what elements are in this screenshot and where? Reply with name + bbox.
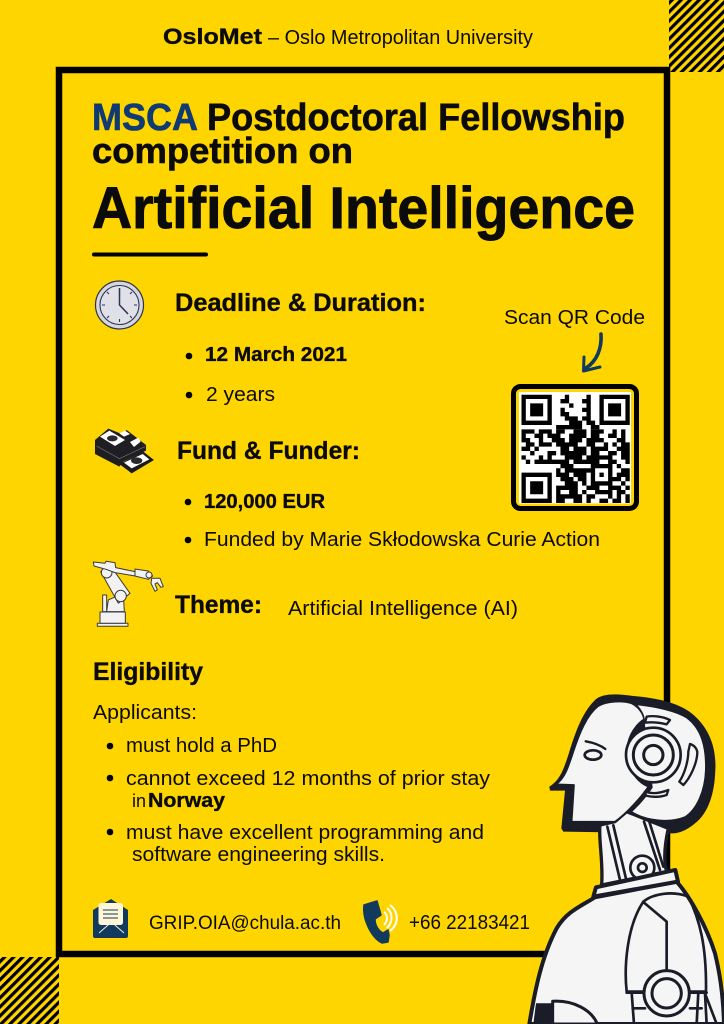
title	[92, 97, 635, 241]
robot body	[529, 882, 724, 1024]
title: competition on	[92, 130, 353, 171]
icon: phone	[364, 901, 397, 943]
black frame	[59, 70, 667, 954]
robot ear rings	[626, 728, 681, 782]
title: MSCA	[92, 97, 198, 139]
eligibility list: in	[132, 791, 146, 811]
header: university: OsloMet	[163, 24, 263, 49]
fund list	[185, 491, 600, 551]
eligibility list	[107, 735, 490, 866]
robot face	[556, 702, 648, 822]
eligibility list: must have excellent programming and	[126, 822, 484, 844]
deadline list: 2 years	[206, 384, 275, 406]
striped corner top right	[669, 0, 724, 72]
illustration: robot	[529, 694, 724, 1024]
deadline list	[186, 344, 347, 406]
header: university	[163, 24, 533, 49]
heading: theme: Theme:	[175, 591, 262, 619]
robot neck	[600, 812, 668, 885]
arrow to qr code	[584, 334, 601, 371]
icon: robot arm	[93, 561, 163, 626]
theme value: Artificial Intelligence (AI)	[288, 598, 518, 620]
header: university: – Oslo Metropolitan University	[268, 27, 533, 49]
deadline list: 12 March 2021	[205, 344, 347, 366]
robot arm details	[626, 893, 706, 992]
eligibility list: Norway	[148, 790, 226, 812]
striped corner bottom left	[0, 957, 59, 1024]
phone number: +66 22183421	[409, 912, 530, 934]
fund list: Funded by Marie Skłodowska Curie Action	[204, 529, 600, 551]
heading: deadline and duration: Deadline & Duration:	[175, 289, 426, 317]
robot back of head	[631, 704, 706, 821]
fund list: 120,000 EUR	[204, 491, 326, 513]
title underline	[92, 252, 208, 256]
qr code	[514, 386, 636, 508]
icon: envelope	[93, 899, 128, 938]
robot eye and brow	[586, 741, 605, 749]
email: GRIP.OIA@chula.ac.th	[149, 913, 341, 934]
eligibility list: must hold a PhD	[126, 735, 277, 757]
eligibility list: cannot exceed 12 months of prior stay	[126, 768, 490, 790]
icon: stack of money	[95, 429, 154, 473]
eligibility list: software engineering skills.	[132, 844, 385, 866]
heading: eligibility: Eligibility	[93, 658, 203, 686]
icon: clock	[96, 281, 144, 329]
title: Artificial Intelligence	[92, 176, 635, 241]
title: Postdoctoral Fellowship	[207, 97, 625, 139]
robot head silhouette	[549, 694, 715, 833]
scan qr label: Scan QR Code	[504, 307, 645, 329]
heading: fund and funder: Fund & Funder:	[177, 437, 360, 465]
applicants label: Applicants:	[93, 702, 197, 724]
robot collar	[593, 870, 678, 897]
